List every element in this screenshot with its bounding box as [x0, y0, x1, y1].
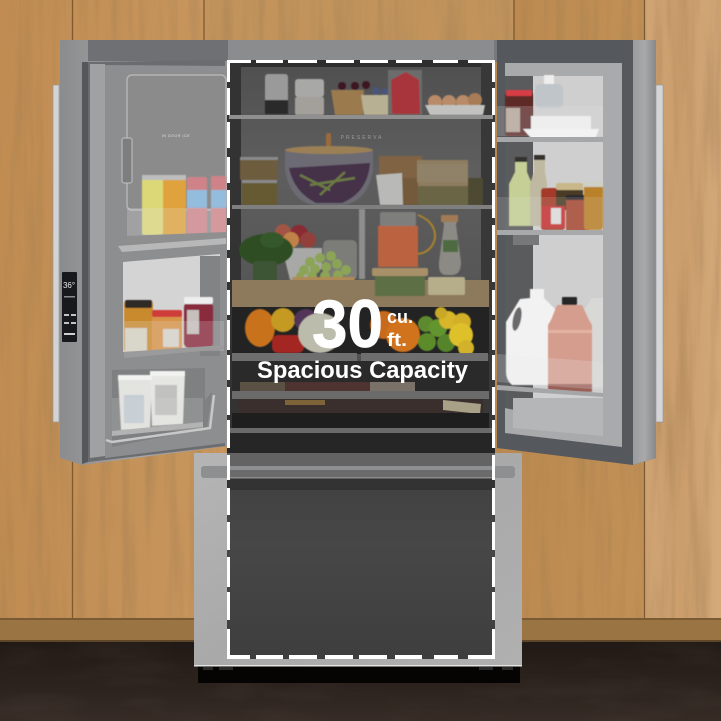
top shelf items: [505, 75, 599, 138]
dressing bottles and jars: [509, 155, 603, 232]
middle door bin: [124, 321, 224, 358]
lower door pocket: [112, 368, 212, 447]
left door gasket strip: [82, 62, 88, 464]
carafe: [439, 215, 461, 275]
stacked containers: [240, 157, 278, 205]
unit ft.: ft.: [387, 329, 407, 350]
capacity label: [257, 286, 469, 384]
wood bowl: [292, 277, 355, 294]
freezer feet: [203, 667, 513, 670]
salad bowl: [285, 133, 373, 205]
crisper fronts: [232, 353, 357, 361]
glass jar: [323, 240, 357, 280]
floor shadow under fridge: [198, 664, 520, 683]
dimmed freezer door: [227, 428, 495, 659]
lower door bin: [106, 395, 214, 442]
crisper lid wood shelf: [232, 280, 489, 307]
spacious capacity caption: Spacious Capacity: [257, 357, 469, 384]
clear grain containers: [417, 160, 483, 206]
bottom dashes: [227, 655, 495, 659]
left door top band: [88, 40, 228, 61]
ice bin handle: [122, 138, 132, 183]
vegetables left crisper: [245, 308, 342, 353]
herb bouquet: [239, 232, 293, 291]
toe kick: [0, 618, 721, 642]
carton: [584, 298, 603, 387]
unit cu.: cu.: [387, 306, 413, 327]
jars: [124, 297, 213, 353]
control display panel: [62, 272, 77, 342]
freezer drawer: [194, 453, 522, 670]
right door handle: [656, 85, 663, 422]
temperature reading: 36°: [63, 281, 75, 290]
grapes: [296, 251, 351, 281]
kraft boxes: [379, 156, 422, 205]
top glass shelf: [229, 115, 493, 119]
middle glass shelf: [232, 205, 493, 209]
pitcher of juice: [378, 212, 435, 267]
cherries in basket: [338, 81, 389, 96]
lower fridge shelf food: [239, 209, 461, 294]
right door: [497, 40, 656, 465]
interior logo: PRESERVA: [341, 135, 383, 141]
left door liner: [105, 65, 226, 458]
left door body: [60, 40, 228, 465]
divider post: [359, 209, 365, 279]
middle shelf opening: [123, 254, 220, 352]
capacity number: 30: [312, 286, 383, 362]
white takeout box: [376, 173, 403, 205]
freezer handle: [201, 466, 515, 478]
apples: [275, 224, 316, 248]
top door shelf: [497, 106, 603, 142]
left door rim: [88, 60, 225, 462]
ice cream tubs: [118, 371, 185, 430]
crisper drawers: [232, 307, 489, 361]
tubs: [295, 79, 324, 115]
top dashes: [227, 60, 495, 63]
pink juice bottle: [548, 297, 592, 392]
dashed capacity outline: [227, 60, 495, 659]
upper door bin: [118, 208, 226, 252]
ice bin cover: [127, 75, 226, 210]
fruit right crisper: [370, 307, 474, 356]
right dashes: [492, 60, 495, 659]
middle door shelf: [497, 197, 603, 245]
capacity highlight area: [227, 60, 495, 659]
watermelon container: [388, 70, 422, 115]
top fridge shelf food: [265, 70, 485, 115]
kraft basket: [331, 90, 364, 115]
lower food containers: [372, 268, 465, 296]
left door: [60, 40, 228, 465]
pantry drawer: [232, 361, 489, 428]
middle fridge shelf food: [240, 133, 483, 206]
crisper background: [232, 307, 489, 354]
right door liner: [505, 63, 622, 447]
fridge top frame: [60, 40, 656, 62]
white berry basket: [361, 95, 393, 115]
bottom door shelf: [497, 354, 603, 397]
left dashes: [227, 60, 230, 659]
egg carton: [425, 93, 485, 115]
milk jug: [506, 289, 558, 385]
dimmed refrigerator interior: [227, 60, 495, 428]
right door back wall: [533, 76, 603, 436]
left door handle: [53, 85, 59, 422]
right door silver edge: [633, 40, 656, 465]
ice bin label: IN DOOR ICE: [162, 134, 190, 138]
floor: [0, 642, 721, 721]
beverage cans: [142, 175, 226, 235]
white bowl: [282, 248, 322, 280]
soda can: [265, 74, 288, 114]
right door body: [497, 40, 656, 465]
